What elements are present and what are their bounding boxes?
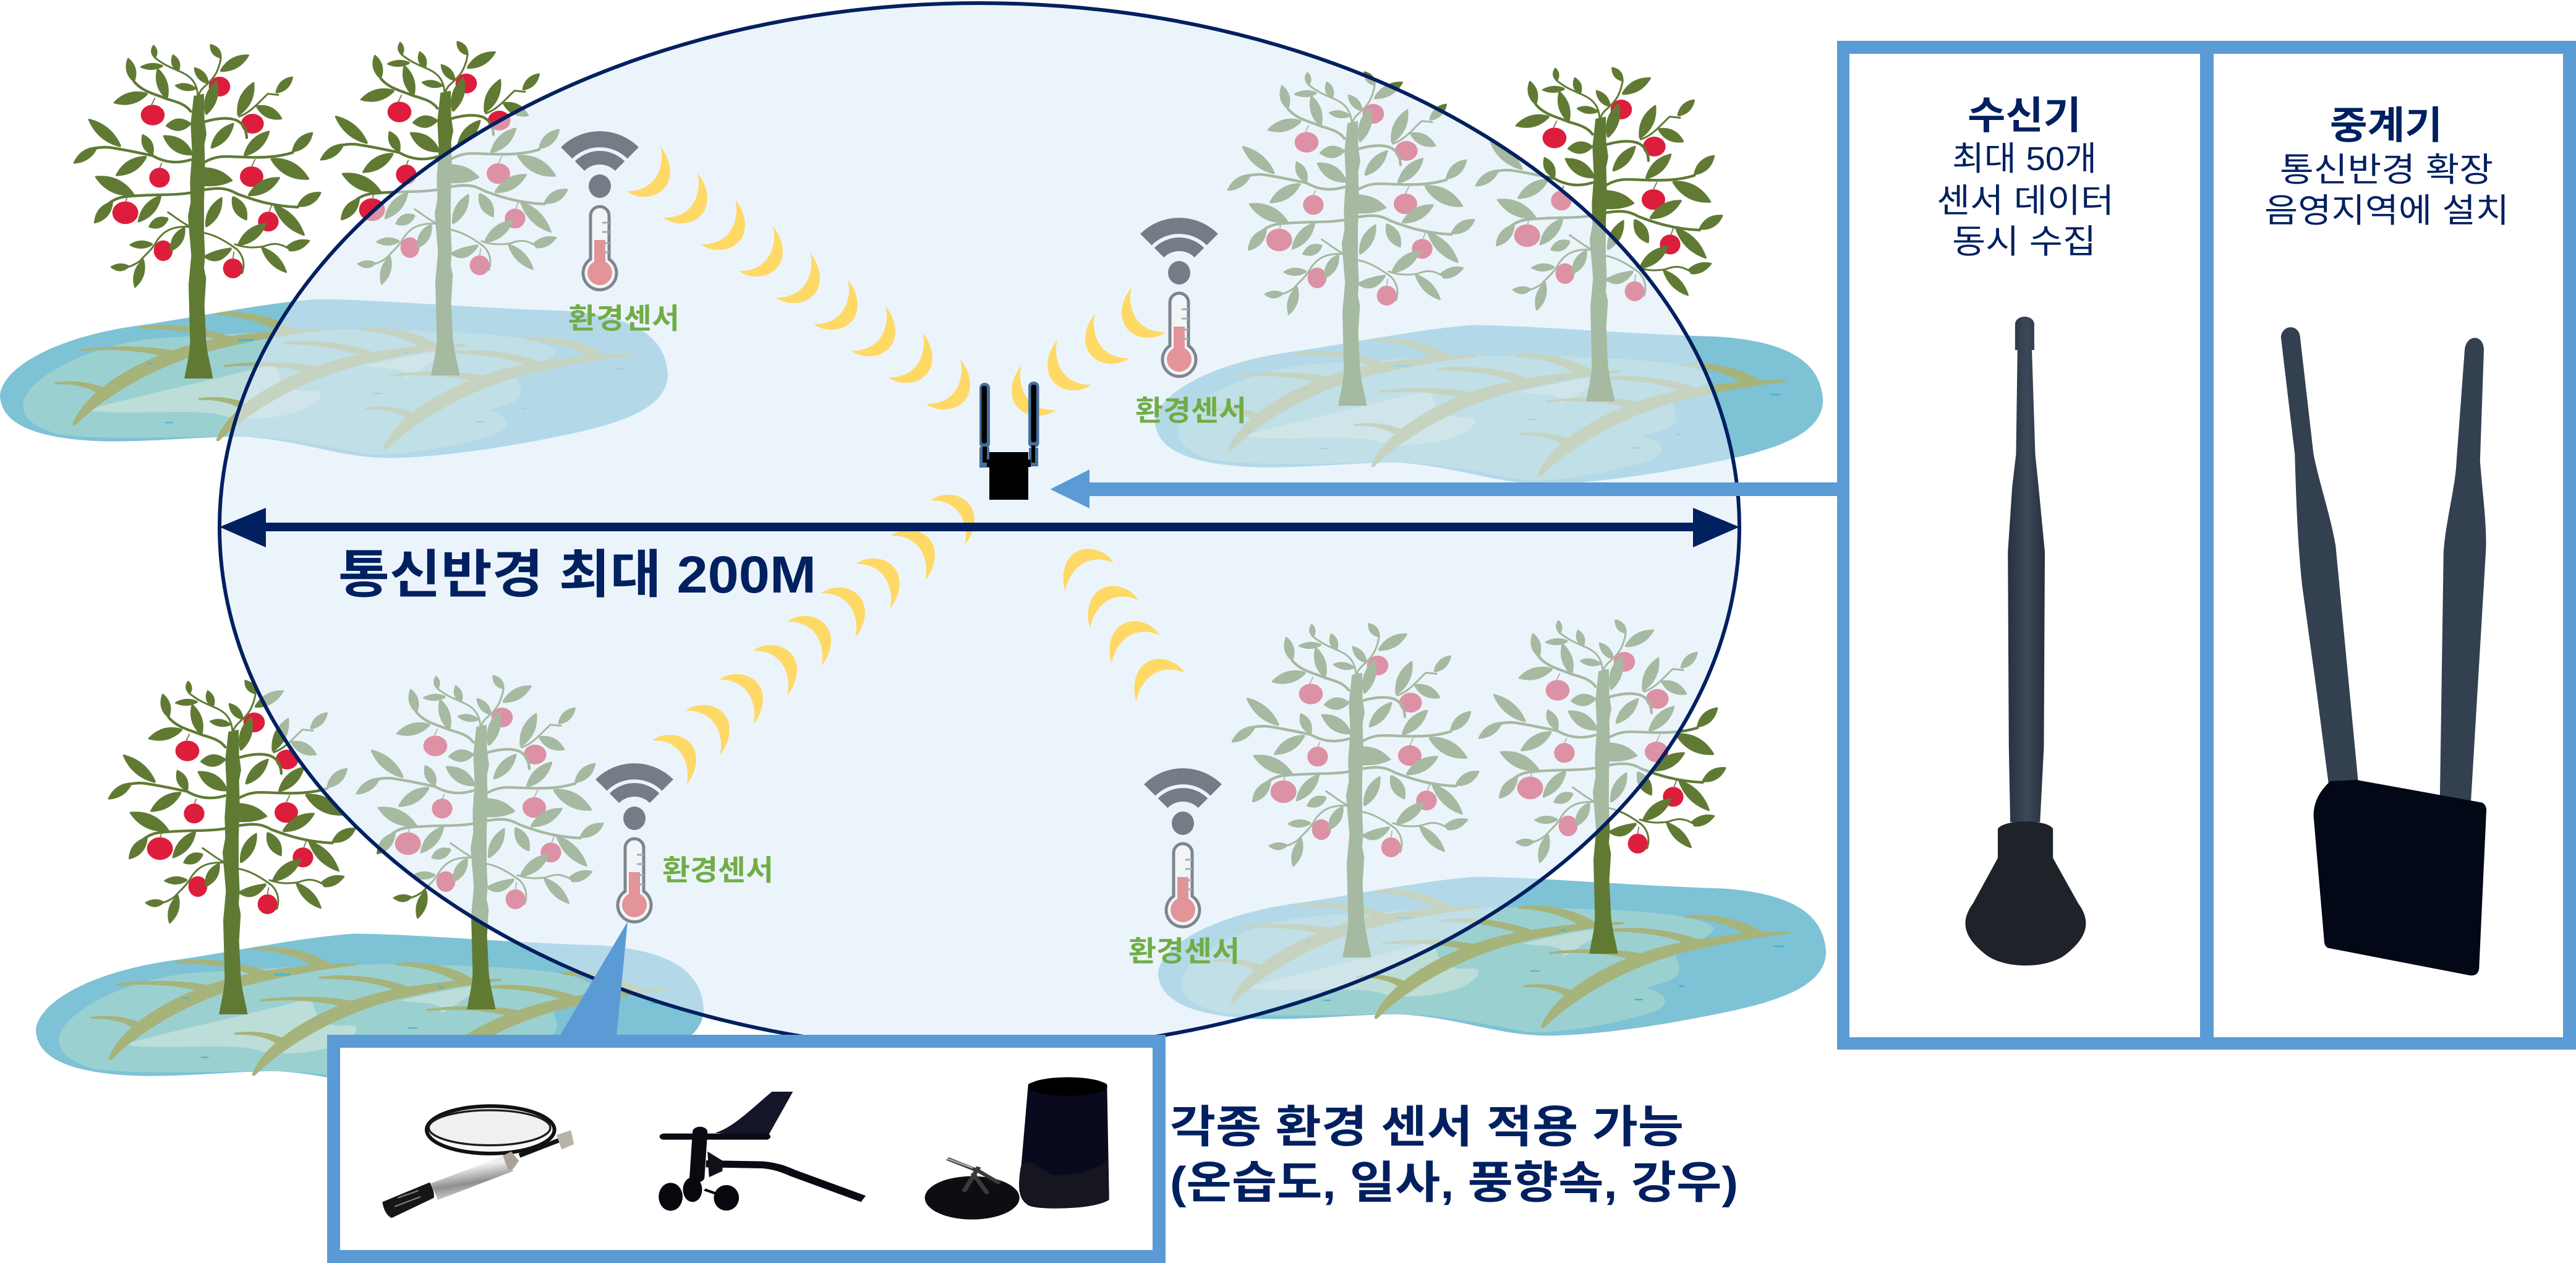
panel: receiver and repeater (1837, 41, 2576, 1050)
sensor: lower right (1128, 776, 1240, 967)
icon: thermometer (583, 207, 616, 289)
icon: thermometer (618, 839, 651, 922)
apple tree 6 (357, 676, 603, 1009)
icon: temperature humidity probe (382, 1106, 574, 1218)
signal waves: lower left sensor to receiver (652, 495, 975, 785)
heading: repeater: 중계기 (2330, 105, 2442, 147)
icon: wind vane and anemometer (659, 1092, 863, 1211)
pond: upper left (0, 299, 668, 458)
pond: lower right (1158, 876, 1826, 1036)
label: environment sensor: 환경센서 (568, 302, 680, 335)
signal waves: upper right sensor to receiver (1012, 288, 1166, 416)
apple tree 4 (1476, 68, 1722, 401)
apple tree 3 (1228, 72, 1474, 406)
text: repeater description: 통신반경 확장 (2280, 152, 2493, 189)
arrow: communication range width (220, 508, 1739, 547)
text: receiver description: 동시 수집 (1952, 223, 2096, 260)
title: communication range: 통신반경 최대 200M (338, 546, 816, 604)
text: receiver description: 최대 50개 (1952, 140, 2097, 178)
text: repeater description: 음영지역에 설치 (2264, 192, 2509, 229)
label: environment sensor: 환경센서 (1135, 395, 1247, 427)
sensor: upper left (566, 139, 680, 335)
icon: wifi (566, 139, 633, 198)
apple tree 8 (1479, 620, 1725, 954)
text: repeater description (2264, 152, 2509, 229)
pond: lower left (36, 933, 704, 1093)
sensor: lower left (601, 771, 774, 922)
icon: wifi (601, 771, 668, 830)
signal waves: lower right sensor to receiver (1056, 541, 1187, 714)
sensor: upper right (1135, 226, 1247, 427)
panel: applicable sensors (334, 1042, 1159, 1257)
heading: receiver: 수신기 (1968, 95, 2081, 137)
line 1: 각종 환경 센서 적용 가능 (1170, 1103, 1684, 1152)
pond: upper right (1155, 325, 1823, 484)
apple tree 7 (1232, 624, 1478, 957)
label: environment sensor: 환경센서 (1128, 935, 1240, 967)
line 2: (온습도, 일사, 풍향속, 강우) (1170, 1158, 1738, 1208)
text: receiver description (1937, 140, 2114, 260)
icon: thermometer (1162, 293, 1196, 376)
icon: receiver antenna (1965, 317, 2086, 965)
text: applicable sensors description (1170, 1103, 1738, 1208)
icon: wifi (1149, 776, 1216, 835)
icon: thermometer (1166, 844, 1200, 927)
signal waves: upper left sensor to receiver (626, 147, 970, 409)
apple tree 2 (321, 42, 567, 375)
arrow: receiver panel to central receiver (1050, 469, 1840, 508)
icon: central receiver (979, 382, 1039, 500)
communication range ellipse (220, 3, 1739, 1051)
icon: repeater with two antennas (2281, 327, 2486, 975)
apple tree 5 (109, 681, 355, 1014)
callout pointer to sensor panel (560, 922, 628, 1050)
label: environment sensor: 환경센서 (662, 854, 774, 886)
apple tree 1 (74, 45, 320, 379)
text: receiver description: 센서 데이터 (1937, 182, 2114, 220)
icon: wifi (1146, 226, 1213, 285)
icon: rain gauge (925, 1077, 1109, 1220)
